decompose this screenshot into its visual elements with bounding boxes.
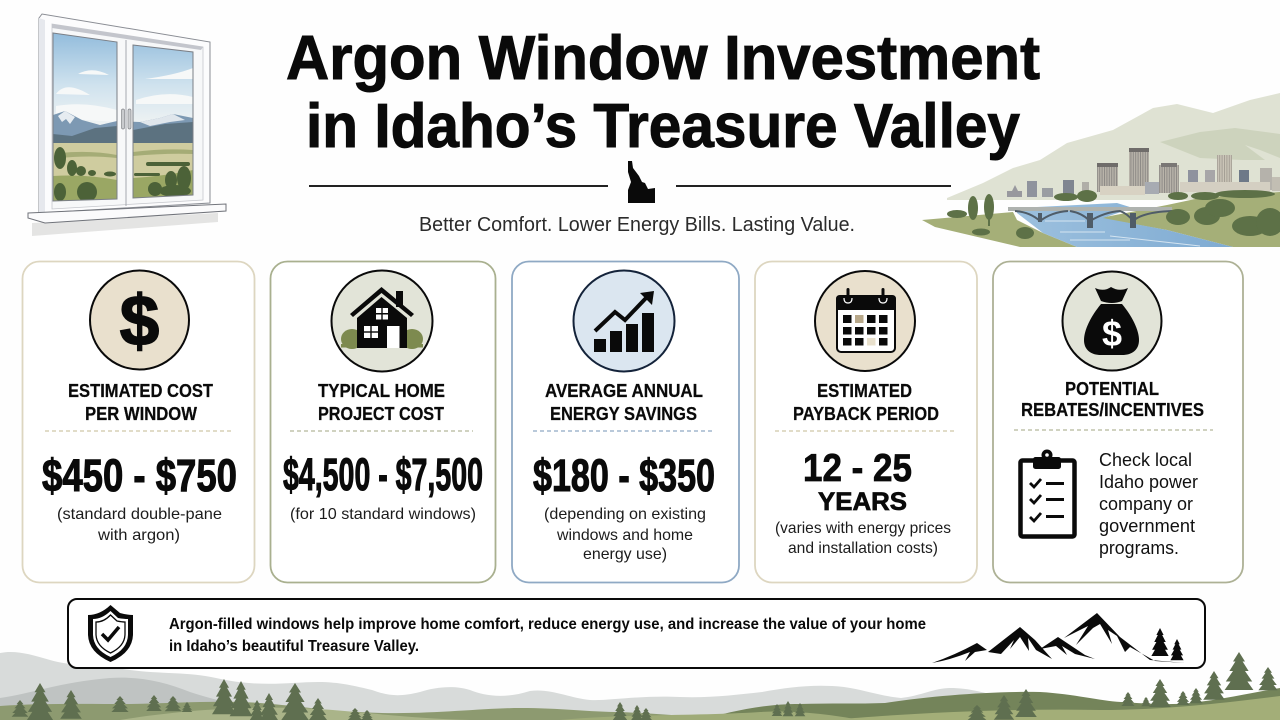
illustration: Boise skyline with river and bridge [922, 93, 1280, 247]
value: $180 - $350: $180 - $350 [533, 450, 715, 501]
icon: money bag [1062, 272, 1162, 370]
value: $4,500 - $7,500: $4,500 - $7,500 [283, 449, 483, 500]
icon: clipboard checklist [1020, 450, 1074, 536]
heading: average annual energy savings: ENERGY SAVINGS [550, 403, 697, 424]
heading: typical home project cost: TYPICAL HOME [318, 380, 445, 401]
icon: house with shrubs [332, 270, 432, 372]
heading: estimated payback period: ESTIMATED [817, 380, 912, 401]
heading: potential rebates/incentives [1021, 378, 1204, 420]
text: footer message [169, 616, 926, 655]
text: check local programs: programs. [1099, 537, 1179, 558]
heading: average annual energy savings: AVERAGE ANNUAL [545, 380, 703, 401]
text: check local programs: government [1099, 515, 1195, 536]
text: check local programs [1099, 449, 1198, 558]
value: 12 - 25 years [803, 447, 912, 516]
note: depending on existing windows and home energy use [544, 506, 706, 563]
text: footer message: in Idaho’s beautiful Treasure Valley. [169, 638, 419, 655]
heading: potential rebates/incentives: POTENTIAL [1065, 378, 1159, 399]
title divider with Idaho state silhouette [309, 161, 951, 203]
text: check local programs: Idaho power [1099, 471, 1198, 492]
panel: potential rebates and incentives [993, 262, 1243, 582]
panel: estimated cost per window [22, 262, 254, 582]
icon: money bag: $ [1102, 313, 1122, 354]
heading: potential rebates/incentives: REBATES/INCENTIVES [1021, 399, 1204, 420]
heading: typical home project cost [318, 380, 445, 424]
note: standard double-pane with argon: with argon) [97, 527, 180, 544]
text: check local programs: company or [1099, 493, 1193, 514]
illustration: window with valley view [28, 14, 226, 236]
value: 12 - 25 years: YEARS [818, 488, 907, 516]
heading: typical home project cost: PROJECT COST [318, 403, 445, 424]
note: varies with energy prices and installation costs [775, 520, 951, 557]
icon: mountain range with pine trees [932, 613, 1185, 663]
note: for 10 standard windows: (for 10 standard windows) [290, 506, 476, 523]
heading: estimated cost per window: PER WINDOW [85, 403, 197, 424]
note: depending on existing windows and home energy use: (depending on existing [544, 506, 706, 523]
note: standard double-pane with argon: (standard double-pane [57, 506, 222, 523]
panel: estimated payback period [755, 262, 977, 582]
heading: estimated cost per window: ESTIMATED COST [68, 380, 214, 401]
note: depending on existing windows and home energy use: energy use) [583, 546, 667, 563]
callout: footer statement [68, 599, 1205, 668]
title: Argon Window Investment [286, 24, 1040, 93]
icon: rising bar chart [574, 270, 674, 372]
note: varies with energy prices and installation costs: and installation costs) [788, 540, 938, 557]
subtitle: Better Comfort. Lower Energy Bills. Lasting Value. [419, 214, 855, 236]
icon: dollar sign: $ [120, 282, 159, 361]
panel: typical home project cost [270, 262, 496, 582]
heading: estimated payback period [793, 380, 939, 424]
panel: average annual energy savings [512, 262, 739, 582]
background landscape: bottom hills and trees [0, 652, 1280, 720]
icon: dollar sign [90, 270, 189, 370]
note: varies with energy prices and installation costs: (varies with energy prices [775, 520, 951, 537]
icon: shield with check [88, 605, 133, 662]
heading: average annual energy savings [545, 380, 703, 424]
heading: estimated payback period: PAYBACK PERIOD [793, 403, 939, 424]
heading: estimated cost per window [68, 380, 214, 424]
text: check local programs: Check local [1099, 449, 1192, 470]
title: in Idaho’s Treasure Valley [306, 92, 1020, 161]
title [286, 24, 1040, 161]
value: $450 - $750: $450 - $750 [42, 450, 237, 501]
text: footer message: Argon-filled windows help improve home comfort, reduce energy use, and increase the value of your home [169, 616, 926, 633]
note: standard double-pane with argon [57, 506, 222, 544]
icon: calendar [815, 271, 915, 371]
note: depending on existing windows and home energy use: windows and home [556, 527, 693, 544]
value: 12 - 25 years: 12 - 25 [803, 447, 912, 490]
